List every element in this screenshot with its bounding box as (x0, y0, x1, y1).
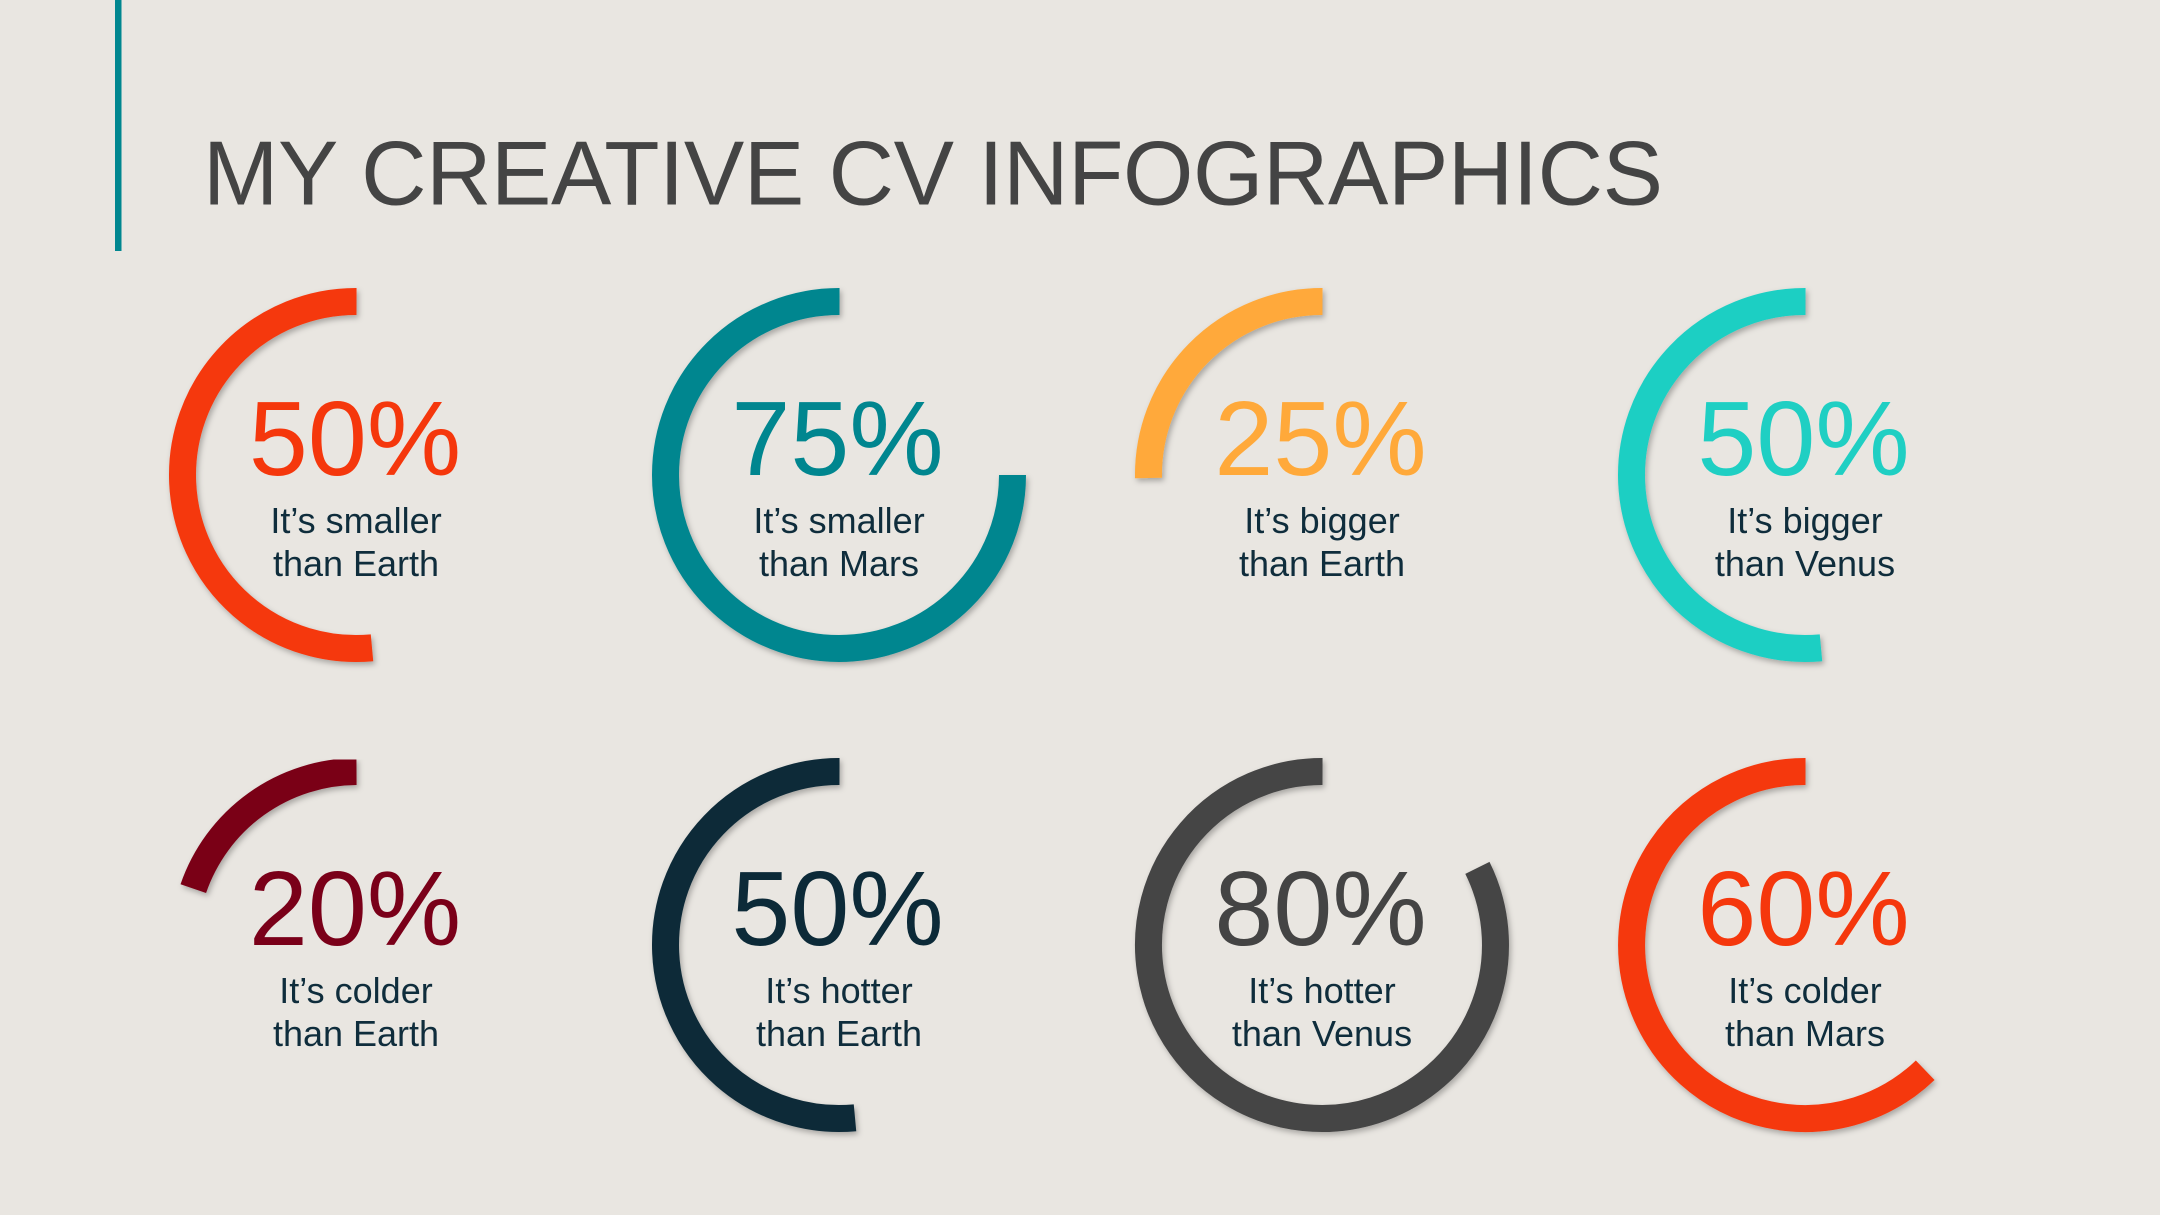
ring: 75% smaller than Mars: 75% (731, 380, 944, 498)
ring: 50% hotter than Earth (666, 771, 944, 1118)
ring: 50% bigger than Venus: 50% (1697, 380, 1910, 498)
accent bar (115, 0, 122, 251)
ring: 25% bigger than Earth: 25% (1214, 380, 1427, 498)
ring: 20% colder than Earth: than Earth (273, 1013, 439, 1054)
ring: 20% colder than Earth: It’s colder (279, 970, 433, 1011)
ring: 20% colder than Earth: 20% (249, 850, 461, 968)
ring: 60% colder than Mars (1632, 771, 1925, 1118)
ring: 80% hotter than Venus: than Venus (1232, 1013, 1412, 1054)
ring: 50% hotter than Earth: It’s hotter (765, 970, 913, 1011)
ring: 50% smaller than Earth: It’s smaller (270, 500, 442, 541)
ring: 50% smaller than Earth: than Earth (273, 543, 439, 584)
ring: 80% hotter than Venus (1148, 771, 1495, 1118)
ring: 60% colder than Mars: 60% (1697, 850, 1910, 968)
ring: 50% hotter than Earth: 50% (731, 850, 944, 968)
ring: 50% bigger than Venus: It’s bigger (1727, 500, 1883, 541)
ring: 80% hotter than Venus: It’s hotter (1248, 970, 1396, 1011)
ring: 25% bigger than Earth (1148, 301, 1427, 584)
ring: 60% colder than Mars: It’s colder (1728, 970, 1882, 1011)
ring: 75% smaller than Mars (665, 301, 1012, 648)
ring: 25% bigger than Earth: It’s bigger (1244, 500, 1400, 541)
ring: 20% colder than Earth (193, 772, 461, 1054)
ring: 50% smaller than Earth: 50% (249, 380, 461, 498)
ring: 60% colder than Mars: than Mars (1725, 1013, 1885, 1054)
ring: 50% bigger than Venus: than Venus (1715, 543, 1895, 584)
ring: 50% bigger than Venus (1632, 301, 1910, 648)
ring: 50% smaller than Earth (183, 301, 461, 648)
ring: 80% hotter than Venus: 80% (1214, 850, 1427, 968)
ring: 75% smaller than Mars: than Mars (759, 543, 919, 584)
title: MY CREATIVE CV INFOGRAPHICS (203, 124, 1663, 224)
ring: 25% bigger than Earth: than Earth (1239, 543, 1405, 584)
ring: 50% hotter than Earth: than Earth (756, 1013, 922, 1054)
ring: 75% smaller than Mars: It’s smaller (753, 500, 925, 541)
